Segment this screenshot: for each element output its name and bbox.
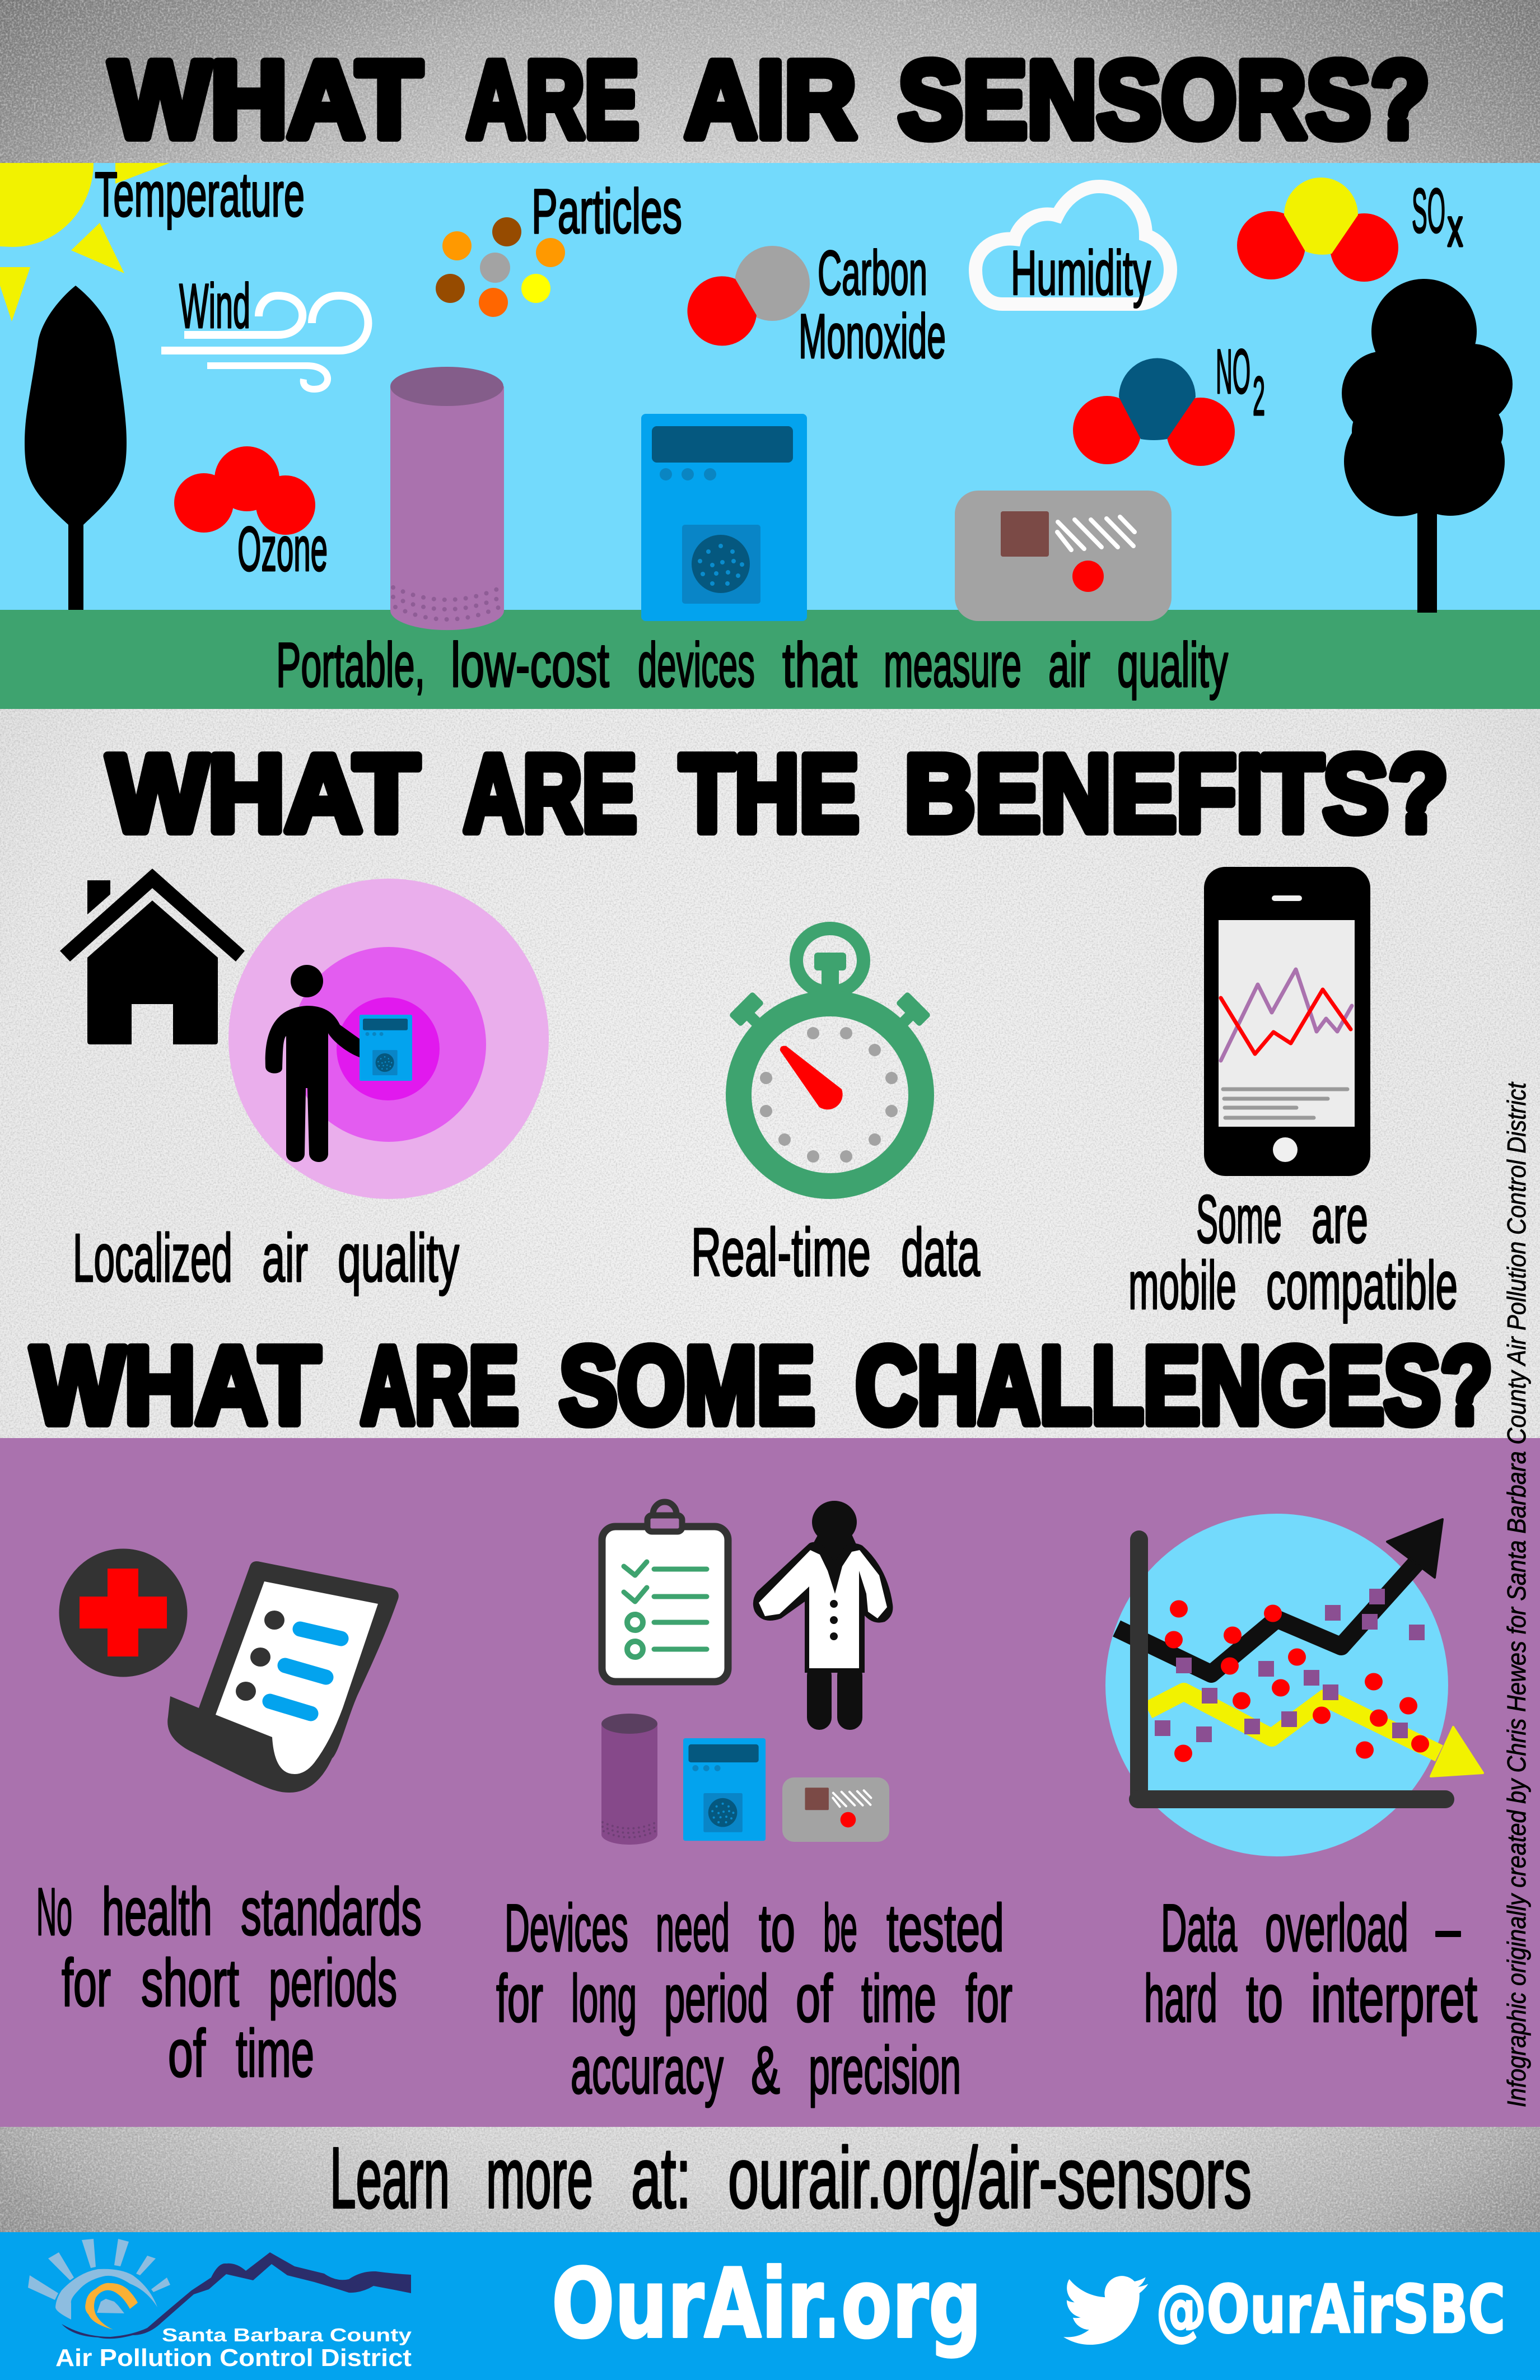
ground bbox=[0, 610, 1540, 709]
label: data overload hard to interpret: overload bbox=[1265, 1891, 1408, 1966]
label: devices need to be tested: long bbox=[571, 1961, 637, 2036]
call to action: learn more bbox=[330, 2130, 1252, 2226]
logo rays and arc bbox=[28, 2239, 170, 2320]
label: carbon monoxide: Carbon bbox=[818, 238, 927, 308]
caption: portable low-cost devices: that bbox=[782, 630, 857, 700]
label: no health standards bbox=[36, 1874, 422, 2091]
label: no health standards: periods bbox=[269, 1945, 397, 2020]
logo text: Air Pollution Control District bbox=[55, 2344, 412, 2372]
title: what are some challenges: WHAT bbox=[31, 1324, 320, 1446]
icon: cloud bbox=[976, 186, 1170, 304]
label: some are mobile compatible bbox=[1128, 1181, 1458, 1323]
label: devices need to be tested: tested bbox=[886, 1891, 1004, 1966]
title: what are the benefits: WHAT bbox=[108, 732, 419, 855]
label: data overload hard to interpret: to bbox=[1246, 1961, 1283, 2036]
title: what are the benefits: BENEFITS? bbox=[904, 732, 1448, 855]
panel: challenges bbox=[0, 1438, 1540, 2127]
label: devices need to be tested: & bbox=[751, 2033, 780, 2108]
website: ourair.org: OurAir.org bbox=[552, 2248, 982, 2360]
icon: right tree bbox=[1342, 279, 1513, 613]
label: devices need to be tested: for bbox=[496, 1961, 543, 2036]
label: no2 bbox=[1216, 337, 1265, 427]
benefit: real-time data bbox=[691, 928, 980, 1290]
footer background bbox=[0, 2232, 1540, 2380]
label: devices need to be tested: period bbox=[664, 1961, 768, 2036]
icon: concentric air zones bbox=[228, 879, 549, 1199]
caption: portable low-cost devices: devices bbox=[638, 630, 755, 700]
label: no health standards: of bbox=[168, 2016, 206, 2091]
title: what are air sensors: SENSORS? bbox=[898, 39, 1430, 161]
benefit: localized air quality bbox=[60, 869, 549, 1296]
label: devices need to be tested: accuracy bbox=[571, 2033, 724, 2108]
icon: particles bbox=[436, 217, 565, 317]
label: sox: x bbox=[1448, 198, 1463, 258]
label: data overload hard to interpret: hard bbox=[1144, 1961, 1217, 2036]
icon: document list bbox=[167, 1561, 399, 1793]
label: devices need to be tested: to bbox=[759, 1891, 795, 1966]
icon: sox molecule bbox=[1237, 178, 1398, 282]
label: no2: NO bbox=[1216, 337, 1250, 407]
label: real-time data: Real-time bbox=[691, 1214, 871, 1290]
title: what are air sensors bbox=[110, 39, 1430, 161]
icon: small purple cylinder bbox=[601, 1714, 657, 1845]
label: no health standards: No bbox=[36, 1874, 72, 1949]
label: sox bbox=[1412, 176, 1463, 258]
call to action: learn more: at: bbox=[631, 2130, 691, 2226]
title: what are the benefits: THE bbox=[680, 732, 859, 855]
label: devices need to be tested: time bbox=[861, 1961, 936, 2036]
label: devices need to be tested: for bbox=[965, 1961, 1012, 2036]
title: what are air sensors: AIR bbox=[685, 39, 856, 161]
label: some are mobile compatible: are bbox=[1312, 1181, 1368, 1257]
panel: what are air sensors scene bbox=[0, 160, 1540, 709]
panel: footer bbox=[0, 2232, 1540, 2380]
label: temperature: Temperature bbox=[95, 160, 305, 230]
title: what are air sensors: ARE bbox=[466, 39, 639, 161]
label: devices need to be tested: be bbox=[823, 1891, 857, 1966]
label: devices need to be tested: Devices bbox=[505, 1891, 628, 1966]
challenge: no health standards bbox=[36, 1549, 422, 2091]
label: carbon monoxide bbox=[799, 238, 946, 371]
icon: stopwatch bbox=[729, 928, 931, 1186]
label: no health standards: for bbox=[62, 1945, 111, 2020]
caption: portable low-cost devices: measure bbox=[884, 630, 1021, 700]
panel: what are air sensors scene: Ozone bbox=[237, 514, 328, 584]
logo mountain wave bbox=[62, 2252, 411, 2339]
label: localized air quality: Localized bbox=[73, 1220, 232, 1296]
logo text bbox=[55, 2325, 412, 2372]
panel: what are air sensors scene: 2 bbox=[1253, 365, 1265, 427]
caption: portable low-cost devices: Portable, bbox=[276, 630, 425, 700]
label: no health standards: standards bbox=[241, 1874, 422, 1949]
panel: benefits bbox=[60, 867, 1458, 1323]
logo text: Santa Barbara County bbox=[162, 2325, 412, 2345]
title: what are the benefits bbox=[108, 732, 1448, 855]
icon: smartphone bbox=[1204, 867, 1370, 1176]
label: no health standards: short bbox=[141, 1945, 239, 2020]
label: devices need to be tested bbox=[496, 1891, 1012, 2108]
label: humidity: Humidity bbox=[1011, 238, 1151, 308]
icon: wind bbox=[161, 296, 368, 389]
challenge: data overload bbox=[1105, 1514, 1483, 2036]
panel background bbox=[0, 1438, 1540, 2127]
label: no health standards: time bbox=[236, 2016, 314, 2091]
label: localized air quality: quality bbox=[338, 1220, 459, 1296]
icon: grey sensor bbox=[955, 491, 1172, 621]
caption: portable low-cost devices: air bbox=[1048, 630, 1090, 700]
label: data overload hard to interpret: – bbox=[1436, 1891, 1460, 1966]
logo: santa barbara county apcd bbox=[28, 2239, 412, 2372]
title: what are some challenges bbox=[31, 1324, 1492, 1446]
call to action: learn more: more bbox=[486, 2130, 593, 2226]
label: some are mobile compatible: mobile bbox=[1128, 1247, 1236, 1323]
call to action: learn more: Learn bbox=[330, 2130, 450, 2226]
label: localized air quality: air bbox=[262, 1220, 308, 1296]
title: what are air sensors: WHAT bbox=[110, 39, 422, 161]
icon: small grey sensor bbox=[782, 1777, 889, 1842]
caption: portable low-cost devices bbox=[276, 630, 1228, 700]
icon: handheld sensor bbox=[360, 1015, 412, 1081]
icon: red cross badge bbox=[59, 1549, 187, 1677]
icon: house bbox=[60, 869, 245, 1044]
sky bbox=[0, 163, 1540, 610]
title: what are some challenges: ARE bbox=[361, 1324, 519, 1446]
label: some are mobile compatible: Some bbox=[1196, 1181, 1282, 1257]
chart: scattered data bbox=[1105, 1514, 1483, 1856]
label: sox: SO bbox=[1412, 176, 1445, 246]
label: devices need to be tested: of bbox=[796, 1961, 833, 2036]
title: what are some challenges: SOME bbox=[559, 1324, 815, 1446]
title: what are the benefits: ARE bbox=[464, 732, 637, 855]
panel: what are air sensors scene: Wind bbox=[179, 271, 250, 341]
label: real-time data: data bbox=[901, 1214, 980, 1290]
icon: lab coat scientist bbox=[753, 1501, 893, 1730]
label: particles: Particles bbox=[531, 176, 682, 246]
icon: person bbox=[265, 965, 360, 1162]
call to action: learn more: ourair.org/air-sensors bbox=[728, 2130, 1252, 2226]
benefit: mobile compatible bbox=[1128, 867, 1458, 1323]
caption: portable low-cost devices: quality bbox=[1117, 630, 1228, 700]
logo sun crescent bbox=[85, 2283, 138, 2330]
icon: carbon monoxide molecule bbox=[687, 246, 810, 346]
challenge: long testing bbox=[496, 1501, 1012, 2108]
credit: rotated attribution: Infographic originally created by Chris Hewes for Santa Barbara County Air Pollution Control District bbox=[1502, 1081, 1531, 2107]
icon: blue box sensor bbox=[641, 414, 807, 621]
label: no health standards: health bbox=[102, 1874, 212, 1949]
icon: left tree bbox=[25, 286, 127, 610]
icon: purple cylinder sensor bbox=[390, 367, 504, 630]
icon: twitter bird bbox=[1063, 2276, 1148, 2345]
label: data overload hard to interpret: Data bbox=[1161, 1891, 1237, 1966]
icon: small blue sensor bbox=[683, 1738, 766, 1841]
caption: portable low-cost devices: low-cost bbox=[451, 630, 609, 700]
icon: clipboard checklist bbox=[602, 1502, 728, 1682]
label: data overload hard to interpret bbox=[1144, 1891, 1477, 2036]
label: devices need to be tested: need bbox=[656, 1891, 730, 1966]
icon: sun bbox=[0, 163, 170, 321]
icon: no2 molecule bbox=[1073, 358, 1235, 466]
label: devices need to be tested: precision bbox=[809, 2033, 961, 2108]
label: carbon monoxide: Monoxide bbox=[799, 301, 946, 371]
icon: ozone bbox=[174, 446, 315, 535]
